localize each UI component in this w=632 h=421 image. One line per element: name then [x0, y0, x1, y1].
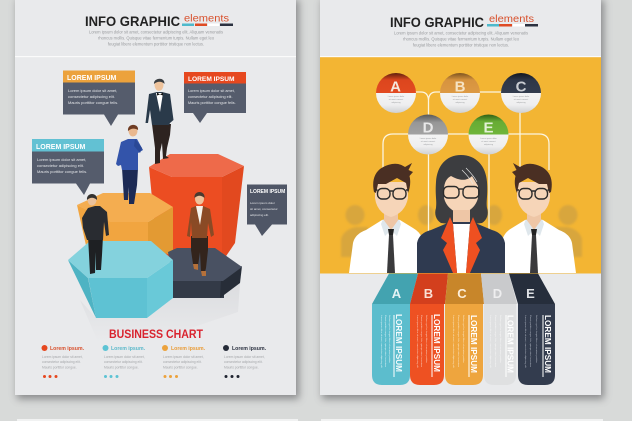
node: D: adipiscing — [424, 144, 432, 146]
title: INFO GRAPHIC — [390, 15, 484, 30]
intro text: Lorem ipsum dolor sit amet, consectetur adipiscing elit. Aliquam venenatis — [394, 30, 528, 36]
panel: business chart page — [15, 0, 296, 395]
node: E: adipiscing — [484, 144, 493, 146]
title: elements — [184, 12, 229, 24]
tab: D — [481, 274, 517, 385]
callout: orange: Mauris porttitor congue felis. — [68, 100, 118, 105]
tab: C: C — [457, 286, 467, 301]
legend: orange — [162, 345, 206, 378]
legend: teal: Lorem ipsum. — [111, 346, 146, 352]
callout: dark: sit amet, consectetur — [250, 207, 278, 211]
legend: orange: Mauris porttitor congue. — [163, 366, 198, 370]
title — [390, 13, 538, 30]
tab: D: Nullam eget leo feugiat libero elementum porttitor — [499, 315, 502, 363]
person: woman — [417, 155, 505, 273]
callout: red: Lorem ipsum dolor sit amet, — [188, 89, 235, 93]
tab: B: LOREM IPSUM — [432, 314, 441, 372]
node: A: sit amet consect — [389, 98, 404, 101]
callout: orange: LOREM IPSUM — [67, 75, 117, 82]
hexagon: dark — [168, 248, 242, 298]
callout: teal — [32, 139, 104, 195]
lower pages peeking — [17, 419, 603, 421]
node: D: sit amet consect — [421, 140, 436, 143]
title: elements — [489, 13, 534, 25]
node: D: D — [423, 120, 434, 136]
intro text: Lorem ipsum dolor sit amet, consectetur adipiscing elit. Aliquam venenatis — [89, 30, 223, 34]
legend: teal: Mauris porttitor congue. — [104, 366, 139, 370]
callout: teal: Lorem ipsum dolor sit amet, — [37, 157, 86, 162]
tab: C — [445, 274, 484, 385]
node: E: sit amet consect — [481, 140, 496, 143]
tab: C: Nullam eget leo feugiat libero elementum porttitor — [462, 315, 465, 363]
legend: teal: Lorem ipsum dolor sit amet, — [104, 355, 145, 359]
legend: dark — [223, 345, 267, 378]
legend: red: Lorem ipsum. — [50, 346, 85, 352]
person: blue suit — [116, 125, 143, 204]
tab: D: D — [493, 286, 502, 301]
person: right man — [503, 163, 576, 273]
chart: hexagon steps — [68, 154, 244, 342]
legend: orange: Lorem ipsum dolor sit amet, — [163, 355, 204, 359]
node: B: adipiscing — [456, 102, 464, 104]
legend: dark: Lorem ipsum. — [232, 346, 267, 352]
tab: E: Nullam eget leo feugiat libero elementum porttitor — [535, 315, 538, 363]
node: A: A — [390, 78, 401, 96]
tab: A: Lorem ipsum dolor sit amet, consectetur adipiscing elit — [380, 315, 383, 368]
tab: C: Mauris porttitor congue felis, quisque vitae fermentum — [457, 315, 460, 367]
yellow band — [320, 57, 601, 274]
tab: A: A — [392, 286, 402, 301]
tab: B: B — [424, 286, 433, 301]
title — [85, 12, 233, 29]
node: B: Lorem ipsum dolor — [452, 96, 469, 98]
tab: B: Nullam eget leo feugiat libero elementum porttitor — [425, 315, 428, 363]
title: INFO GRAPHIC — [85, 14, 180, 29]
intro text: feugiat libero elementum porttitor tristique non lectus. — [108, 42, 204, 46]
legend: dark: Lorem ipsum dolor sit amet, — [224, 355, 265, 359]
reflection under chart — [80, 283, 240, 342]
tab: D: Mauris porttitor congue felis, quisque vitae fermentum — [494, 315, 497, 367]
panel: team page — [320, 0, 601, 395]
tab: B: Lorem ipsum dolor sit amet, consectetur adipiscing elit — [416, 315, 419, 368]
intro text: rhoncus mollis. Quisque vitae fermentum turpis. Nullam eget leo — [403, 36, 520, 42]
node: D — [408, 114, 448, 154]
person: brown jacket — [187, 192, 214, 276]
tab: E: E — [526, 286, 535, 301]
node: A — [376, 73, 416, 113]
callout: orange: Lorem ipsum dolor sit amet, — [68, 88, 117, 93]
legend: red: Mauris porttitor congue. — [42, 366, 77, 370]
callout: dark: LOREM IPSUM — [250, 189, 285, 195]
node: C: adipiscing — [517, 102, 525, 104]
hexagon: orange — [77, 193, 173, 255]
tab: A — [372, 274, 418, 385]
person: black suit — [82, 194, 109, 274]
tab: E: Lorem ipsum dolor sit amet, consectetur adipiscing elit — [524, 315, 527, 368]
connector lines — [383, 92, 549, 232]
node: B — [440, 73, 480, 113]
person: left man — [349, 163, 422, 273]
person: navy tuxedo — [146, 79, 174, 164]
callout: orange — [63, 70, 135, 126]
hexagon: red — [149, 154, 244, 262]
callout: orange: consectetur adipiscing elit. — [68, 94, 115, 99]
callout: dark: Lorem ipsum dolor — [250, 201, 275, 205]
tab: A: Nullam eget leo feugiat libero elementum porttitor — [388, 315, 391, 363]
node: B: sit amet consect — [453, 98, 468, 101]
intro text — [394, 30, 528, 48]
legend: red — [42, 345, 85, 378]
callout: red — [184, 72, 246, 123]
intro text — [89, 30, 223, 46]
node: C: C — [516, 78, 527, 96]
node: D: Lorem ipsum dolor — [420, 138, 437, 140]
callout: teal: Mauris porttitor congue felis. — [37, 169, 87, 174]
node: E: Lorem ipsum dolor — [480, 138, 497, 140]
tab: D: LOREM IPSUM — [506, 315, 514, 373]
intro text: rhoncus mollis. Quisque vitae fermentum turpis. Nullam eget leo — [98, 36, 215, 40]
tab: C: LOREM IPSUM — [469, 315, 478, 373]
tab: A: Mauris porttitor congue felis, quisque vitae fermentum — [384, 315, 387, 367]
legend: dark: consectetur adipiscing elit. — [224, 360, 263, 364]
node: C — [501, 73, 541, 113]
chart heading: BUSINESS CHART — [109, 327, 204, 341]
node: A: Lorem ipsum dolor — [388, 96, 405, 98]
node: C: sit amet consect — [514, 98, 529, 101]
legend: dark: Mauris porttitor congue. — [224, 366, 259, 370]
node: C: Lorem ipsum dolor — [513, 96, 530, 98]
legend: teal — [102, 345, 146, 378]
tab: E: LOREM IPSUM — [543, 315, 552, 373]
callout: dark — [247, 184, 287, 236]
legend: orange: Lorem ipsum. — [171, 346, 206, 352]
node: E: E — [483, 120, 494, 136]
callout: red: Mauris porttitor congue felis. — [188, 101, 236, 105]
node: B: B — [455, 78, 466, 96]
intro text: feugiat libero elementum porttitor tristique non lectus. — [413, 42, 509, 48]
tab: B: Mauris porttitor congue felis, quisque vitae fermentum — [420, 315, 423, 367]
tab: C: Lorem ipsum dolor sit amet, consectetur adipiscing elit — [452, 315, 455, 368]
hexagon: teal — [68, 241, 173, 318]
tab: E — [509, 274, 555, 385]
callout: dark: adipiscing elit. — [250, 213, 269, 217]
node: A: adipiscing — [392, 102, 400, 104]
legend: red: consectetur adipiscing elit. — [42, 360, 81, 364]
callout: red: consectetur adipiscing elit. — [188, 95, 233, 99]
node: E — [468, 114, 508, 154]
tab: E: Mauris porttitor congue felis, quisque vitae fermentum — [529, 315, 532, 367]
callout: red: LOREM IPSUM — [188, 76, 235, 83]
tab: A: LOREM IPSUM — [394, 314, 403, 372]
legend: red: Lorem ipsum dolor sit amet, — [42, 355, 83, 359]
legend: orange: consectetur adipiscing elit. — [163, 360, 202, 364]
silhouettes — [341, 205, 582, 257]
tab: B — [410, 274, 448, 385]
callout: teal: LOREM IPSUM — [36, 144, 86, 151]
legend: teal: consectetur adipiscing elit. — [104, 360, 143, 364]
tab: D: Lorem ipsum dolor sit amet, consectetur adipiscing elit — [489, 315, 492, 368]
callout: teal: consectetur adipiscing elit. — [37, 163, 84, 168]
